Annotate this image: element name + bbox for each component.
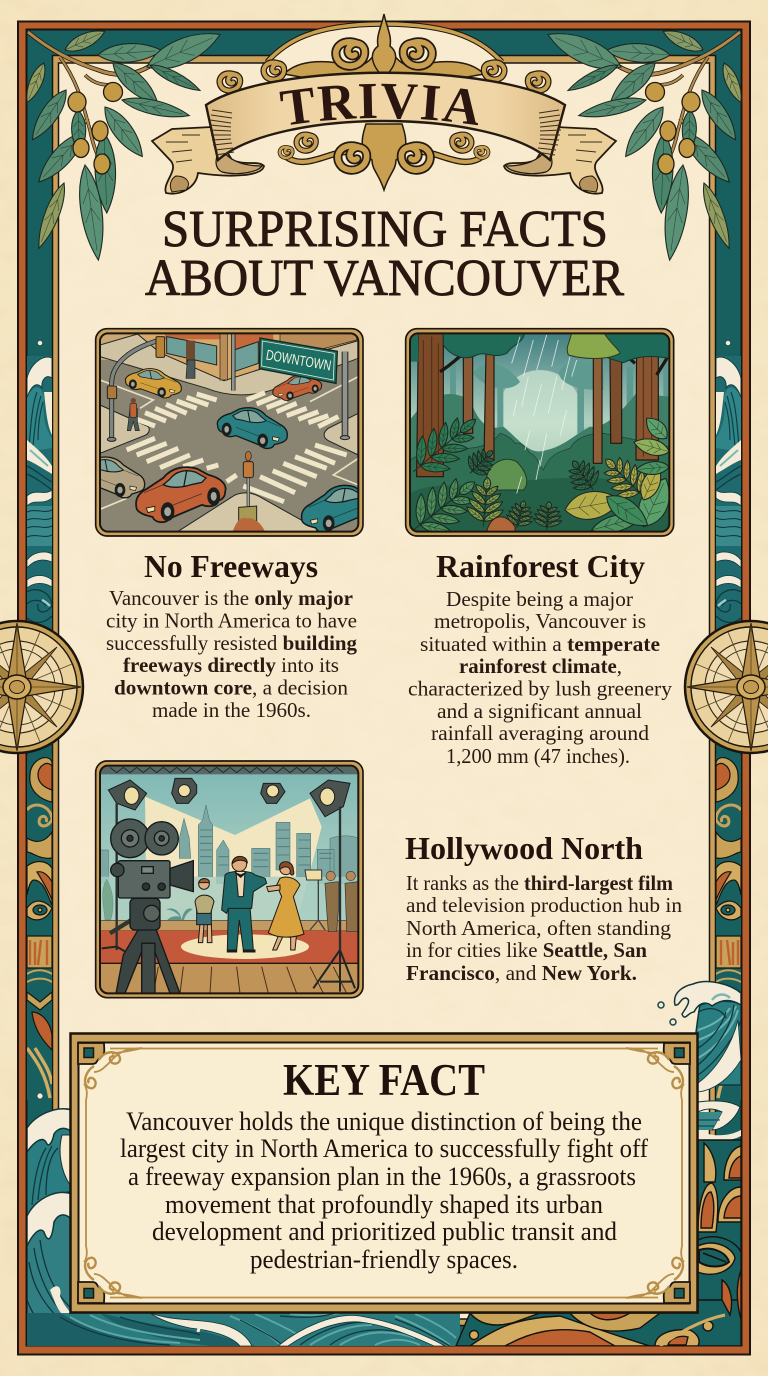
feature: Rainforest City: and a significant annual <box>437 699 642 723</box>
icon: right compass rose <box>685 621 768 753</box>
ocean wave: lower-right border <box>675 982 741 1160</box>
feature: No Freeways: successfully resisted building <box>106 631 357 655</box>
wave band: right border <box>716 356 741 630</box>
callout: Key Fact: KEY FACT <box>283 1055 485 1105</box>
feature: No Freeways: city in North America to have <box>106 608 357 632</box>
olive branch: top left <box>22 23 225 262</box>
banner heading: TRIVIA: TRIVIA <box>280 84 478 126</box>
feature: Hollywood North: Hollywood North <box>405 830 643 866</box>
feature: Rainforest City: Rainforest City <box>436 548 645 584</box>
callout: Key Fact: Vancouver holds the unique distinction of being the <box>126 1107 642 1136</box>
feature: Rainforest City: 1,200 mm (47 inches). <box>446 744 630 768</box>
feature: Rainforest City: situated within a temperate <box>420 632 660 656</box>
callout: Key Fact <box>70 1034 698 1312</box>
ornament: top fleuron <box>220 14 548 92</box>
title: Surprising Facts About Vancouver: ABOUT VANCOUVER <box>145 250 624 307</box>
callout: Key Fact: largest city in North America to successfully fight off <box>120 1134 648 1163</box>
title: Surprising Facts About Vancouver <box>145 201 624 307</box>
callout: Key Fact: pedestrian-friendly spaces. <box>250 1245 518 1274</box>
feature: Hollywood North: It ranks as the third-largest film <box>406 871 673 895</box>
feature: Rainforest City <box>408 548 673 768</box>
wave band: left border <box>27 356 52 630</box>
callout: Key Fact: development and prioritized public transit and <box>152 1217 617 1246</box>
feature: Rainforest City: characterized by lush greenery <box>408 676 673 700</box>
feature: No Freeways: freeways directly into its <box>123 653 339 677</box>
icon: left compass rose <box>0 621 83 753</box>
feature: Rainforest City: rainfall averaging around <box>431 721 649 745</box>
ocean waves: lower-left corner and bottom band <box>27 1109 460 1346</box>
feature: Hollywood North: in for cities like Seattle, San <box>406 938 647 962</box>
bubbles near the wave crest <box>658 1002 676 1025</box>
feature: Rainforest City: metropolis, Vancouver is <box>434 609 646 633</box>
title: Surprising Facts About Vancouver: SURPRISING FACTS <box>162 201 608 258</box>
olive branch: top right <box>543 23 746 262</box>
feature: No Freeways: Vancouver is the only major <box>109 586 353 610</box>
ornate arch behind the banner <box>267 24 502 64</box>
formline pattern: left border <box>27 755 52 1100</box>
small foam dots in the border <box>37 340 731 1099</box>
feature: No Freeways: downtown core, a decision <box>114 676 348 700</box>
formline art: lower-right border and bottom band <box>456 1140 741 1346</box>
formline pattern: right border <box>716 755 741 1100</box>
callout: Key Fact: a freeway expansion plan in the 1960s, a grassroots <box>128 1162 636 1191</box>
feature: Hollywood North: North America, often standing <box>406 916 672 940</box>
feature: Rainforest City: rainforest climate, <box>459 654 622 678</box>
feature: No Freeways: made in the 1960s. <box>152 698 311 722</box>
illustration panel: rainforest in rain <box>397 329 678 551</box>
illustration panel: downtown intersection <box>94 328 364 537</box>
feature: Rainforest City: Despite being a major <box>446 587 633 611</box>
street sign: Downtown <box>259 338 337 383</box>
feature: Hollywood North: Francisco, and New York. <box>406 961 637 985</box>
feature: Hollywood North <box>405 830 683 985</box>
banner heading: TRIVIA <box>280 84 478 126</box>
illustration panel: film set <box>96 761 363 998</box>
street sign: Downtown: DOWNTOWN <box>265 348 332 375</box>
banner: ribbon with tails <box>152 73 616 194</box>
feature: No Freeways <box>106 548 357 722</box>
feature: Hollywood North: and television production hub in <box>406 893 683 917</box>
ornament: lower fleuron <box>280 124 488 190</box>
feature: No Freeways: No Freeways <box>144 548 318 584</box>
callout: Key Fact: movement that profoundly shaped its urban <box>165 1190 603 1219</box>
